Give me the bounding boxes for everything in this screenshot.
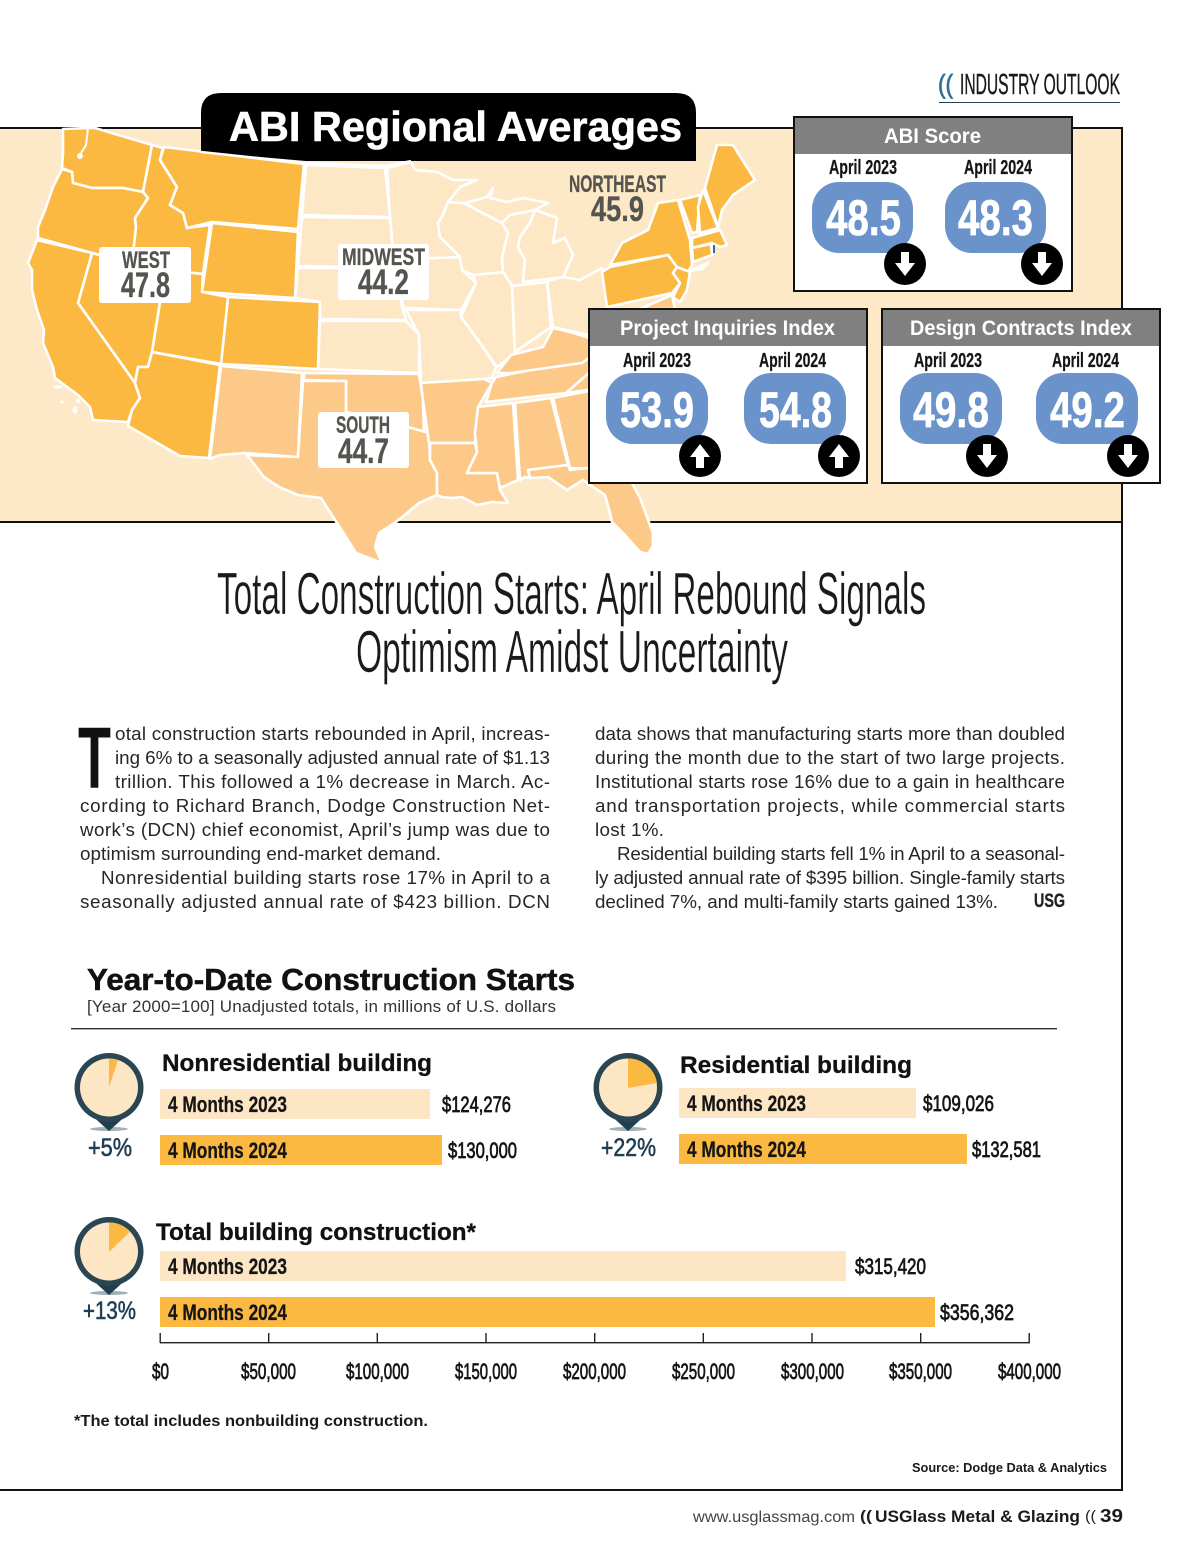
chart axis: $350,000 (889, 1359, 952, 1384)
chart: Nonresidential building: +5% (88, 1134, 132, 1162)
page footer: (( (860, 1508, 872, 1525)
chart: Residential building (594, 1052, 1041, 1164)
article text: left column: Nonresidential building starts rose 17% in April to a (101, 867, 551, 888)
article text: left column: optimism surrounding end-market demand. (80, 843, 441, 864)
region: Northeast states (602, 145, 755, 309)
map label: Northeast: NORTHEAST (569, 171, 666, 198)
page footer: USGlass Metal & Glazing (875, 1507, 1080, 1526)
map label: Northeast: 45.9 (591, 190, 644, 229)
chart axis: $200,000 (563, 1359, 626, 1384)
chart axis: $50,000 (241, 1359, 296, 1384)
article text: right column: lost 1%. (595, 819, 664, 840)
icon: down arrow (1107, 435, 1149, 477)
article text: right column: and transportation projects, while commercial starts (595, 795, 1065, 816)
article text: right column: during the month due to the start of two large projects. (595, 747, 1065, 768)
panel: Project Inquiries Index: 53.9 (620, 382, 694, 438)
icon: down arrow (966, 435, 1008, 477)
chart: Total building construction: 4 Months 2024 (168, 1300, 288, 1325)
page footer: www.usglassmag.com (692, 1509, 855, 1526)
chart: Residential building: +22% (601, 1134, 656, 1162)
article text: left column: cording to Richard Branch, Dodge Construction Net- (80, 795, 550, 816)
chart: Nonresidential building (74, 1050, 517, 1165)
section header: Industry Outlook (938, 69, 1120, 103)
source note: Source: Dodge Data & Analytics (912, 1461, 1107, 1475)
chart axis: $250,000 (672, 1359, 735, 1384)
chart: Total building construction: $356,362 (940, 1300, 1014, 1325)
article text: right column: declined 7%, and multi-family starts gained 13%. (595, 891, 998, 912)
article text: left column: ing 6% to a seasonally adjusted annual rate of $1.13 (115, 747, 550, 768)
coast details: Puget Sound and California islands (53, 128, 88, 414)
panel: Design Contracts Index (882, 309, 1160, 483)
title banner: ABI Regional Averages (201, 93, 696, 166)
chart: Nonresidential building: $130,000 (448, 1138, 517, 1163)
chart: Total building construction: $315,420 (855, 1254, 926, 1279)
article text: right column: data shows that manufacturing starts more than doubled (595, 723, 1065, 744)
chart: Total building construction (74, 1217, 1014, 1327)
icon: pin gauge +22% (594, 1053, 662, 1131)
map label: South: SOUTH (336, 412, 390, 439)
panel: ABI Score: 48.3 (958, 190, 1033, 246)
article text: left column: trillion. This followed a 1% decrease in March. Ac- (115, 771, 550, 792)
chart heading: Year-to-Date Construction Starts (71, 962, 1057, 1029)
article text: right column: ly adjusted annual rate of $395 billion. Single-family starts (595, 867, 1065, 888)
panel: ABI Score (794, 117, 1072, 291)
article text: left column: seasonally adjusted annual rate of $423 billion. DCN (80, 891, 550, 912)
article headline (217, 561, 926, 685)
page footer: 39 (1100, 1506, 1123, 1526)
map label: South (318, 412, 409, 471)
drop cap T: T (78, 710, 111, 807)
chart: Total building construction: 4 Months 2023 (168, 1254, 287, 1279)
chart axis: $400,000 (998, 1359, 1061, 1384)
chart axis: $0 (152, 1359, 169, 1384)
panel: Design Contracts Index: April 2024 (1052, 350, 1120, 372)
chart: Total building construction: +13% (83, 1297, 136, 1325)
article text: left column: work’s (DCN) chief economist, April’s jump was due to (79, 819, 550, 840)
title banner: ABI Regional Averages: ABI Regional Averages (229, 103, 682, 150)
icon: up arrow (679, 435, 721, 477)
panel: Project Inquiries Index: 54.8 (759, 382, 832, 438)
panel: ABI Score: 48.5 (826, 190, 901, 246)
panel: ABI Score: April 2023 (829, 157, 897, 179)
chart: Residential building: $109,026 (923, 1091, 994, 1116)
panel: Design Contracts Index: 49.8 (913, 382, 989, 438)
chart: Nonresidential building: 4 Months 2024 (168, 1138, 288, 1163)
chart heading: Year-to-Date Construction Starts: Year-to-Date Construction Starts (87, 962, 575, 997)
panel: Project Inquiries Index: April 2023 (623, 350, 691, 372)
map label: Northeast (569, 171, 666, 229)
chart: Residential building: $132,581 (972, 1137, 1041, 1162)
chart heading: Year-to-Date Construction Starts: [Year 2000=100] Unadjusted totals, in millions of U.S. dollars (87, 997, 556, 1016)
icon: pin gauge +5% (74, 1053, 144, 1131)
page footer: (( (1085, 1508, 1096, 1525)
chart axis: $150,000 (455, 1359, 517, 1384)
chart axis (152, 1333, 1061, 1384)
panel: Design Contracts Index: Design Contracts Index (910, 317, 1132, 340)
chart: Nonresidential building: Nonresidential building (162, 1050, 432, 1077)
chart: Nonresidential building: $124,276 (442, 1092, 511, 1117)
icon: down arrow (884, 243, 926, 285)
map label: West (99, 247, 191, 305)
map label: Midwest: MIDWEST (342, 244, 425, 271)
section header: Industry Outlook: (( (938, 69, 953, 99)
map label: West: WEST (122, 247, 170, 274)
icon: pin gauge +13% (74, 1217, 144, 1295)
panel: ABI Score: ABI Score (884, 125, 981, 148)
article text: right column: USG (1034, 891, 1065, 912)
panel: Design Contracts Index: April 2023 (914, 350, 982, 372)
chart: Residential building: 4 Months 2024 (687, 1137, 807, 1162)
chart: Nonresidential building: 4 Months 2023 (168, 1092, 287, 1117)
map label: South: 44.7 (338, 432, 389, 471)
panel: Project Inquiries Index: April 2024 (759, 350, 827, 372)
map label: Midwest: 44.2 (358, 263, 409, 302)
chart axis: $300,000 (781, 1359, 844, 1384)
panel: Project Inquiries Index (589, 309, 867, 483)
panel: Project Inquiries Index: Project Inquiries Index (620, 317, 835, 340)
region: West states (28, 128, 320, 458)
icon: down arrow (1021, 243, 1063, 285)
footnote: *The total includes nonbuilding construction. (74, 1413, 428, 1430)
chart: Residential building: Residential building (680, 1052, 912, 1079)
panel: Design Contracts Index: 49.2 (1050, 382, 1125, 438)
article text: right column (595, 723, 1065, 912)
chart: Residential building: 4 Months 2023 (687, 1091, 806, 1116)
article text: right column: Residential building starts fell 1% in April to a seasonal- (617, 843, 1065, 864)
page footer (692, 1506, 1123, 1526)
article text: left column: otal construction starts rebounded in April, increas- (115, 723, 550, 744)
map of US regions (28, 128, 755, 563)
region: South states (210, 328, 653, 563)
map label: Midwest (338, 244, 429, 302)
article text: right column: Institutional starts rose 16% due to a gain in healthcare (595, 771, 1065, 792)
chart: Total building construction: Total building construction* (156, 1219, 477, 1246)
map label: West: 47.8 (121, 266, 170, 305)
article headline: Optimism Amidst Uncertainty (356, 619, 788, 685)
article text: left column (78, 710, 551, 912)
icon: up arrow (818, 435, 860, 477)
panel: ABI Score: April 2024 (964, 157, 1033, 179)
region: Midwest states (295, 162, 609, 383)
chart axis: $100,000 (346, 1359, 409, 1384)
